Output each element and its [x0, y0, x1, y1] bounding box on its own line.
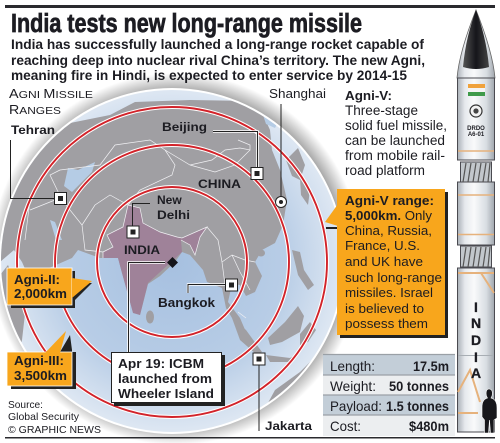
- Agni-V description: Agni-V:: [345, 89, 392, 103]
- Agni-V description: solid fuel missile,: [345, 118, 447, 133]
- callout: Agni-V range: Agni-V range:: [345, 193, 434, 208]
- callout: Agni-II: Agni-II:: [14, 272, 60, 287]
- intro text: [11, 37, 425, 83]
- intro text: India has successfully launched a long-range rocket capable of: [11, 37, 425, 52]
- callout: Agni-V range: is believed to: [345, 301, 424, 316]
- callout: Agni-V range: [325, 189, 448, 338]
- icon: human scale figure: [482, 389, 497, 433]
- India lettering: A: [471, 365, 481, 381]
- nose cone: [457, 10, 495, 78]
- label: New Delhi: [127, 193, 190, 238]
- label: Tehran: [10, 123, 66, 204]
- map heading: RANGES: [9, 103, 61, 117]
- callout: Agni-V range: China, Russia,: [345, 223, 432, 238]
- specifications table: 50 tonnes: [389, 378, 449, 394]
- map heading: [9, 87, 93, 117]
- India: [103, 205, 207, 315]
- label: Bangkok: [158, 279, 238, 310]
- borders: [25, 140, 255, 318]
- specifications table: 1.5 tonnes: [386, 398, 449, 414]
- source credit: Source:: [8, 399, 43, 411]
- Agni-V description: road platform: [345, 163, 425, 178]
- launch site marker: [128, 257, 178, 353]
- top rule: [5, 5, 495, 8]
- emblem: [470, 105, 482, 117]
- missile body: [458, 78, 494, 432]
- label: New Delhi: Delhi: [157, 208, 190, 222]
- label: Tehran: Tehran: [11, 123, 55, 137]
- callout: Agni-III: 3,500km: [14, 368, 67, 383]
- callout: launch date: Wheeler Island: [118, 387, 214, 401]
- label: China: CHINA: [198, 179, 241, 191]
- callout: launch date: [112, 352, 225, 406]
- label: Shanghai: [269, 87, 326, 208]
- label: New Delhi: New: [157, 193, 182, 207]
- specifications table: Length:: [330, 358, 375, 374]
- source credit: Global Security: [8, 411, 80, 423]
- callout: Agni-III: Agni-III:: [14, 353, 64, 368]
- callout: Agni-V range: 5,000km. Only: [345, 208, 433, 223]
- intro text: reaching deep into nuclear rival China’s territory. The new Agni,: [11, 53, 425, 68]
- land masses: [1, 100, 316, 402]
- bottom rule: [5, 437, 495, 438]
- ridged interstages: [463, 163, 490, 267]
- India lettering: N: [471, 315, 481, 331]
- callout: Agni-V range: such long-range: [345, 270, 442, 285]
- missile markings: DRDO: [467, 126, 485, 132]
- missile markings: A6-01: [468, 132, 485, 138]
- India lettering: I: [474, 299, 478, 315]
- specifications table: Weight:: [330, 378, 376, 394]
- specifications table: Cost:: [330, 418, 361, 434]
- Agni-V description: from mobile rail-: [345, 148, 445, 163]
- orange bands: [458, 151, 494, 413]
- specifications table: $480m: [409, 418, 449, 434]
- intro text: meaning fire in Hindi, is expected to enter service by 2014-15: [11, 68, 407, 83]
- specifications table: [323, 354, 455, 436]
- label: Jakarta: [253, 353, 312, 433]
- India lettering: I: [474, 349, 478, 365]
- map heading: AGNI MISSILE: [9, 87, 93, 101]
- callout: launch date: launched from: [118, 372, 212, 386]
- Caspian Sea and gulf: [50, 108, 280, 240]
- callout: Agni-II: 2,000km: [14, 286, 67, 301]
- India lettering: [471, 299, 481, 381]
- callout: Agni-V range: missiles. Israel: [345, 285, 433, 300]
- Agni-V description: Three-stage: [345, 103, 418, 118]
- globe map: [0, 73, 362, 443]
- label: Beijing: [162, 120, 263, 180]
- label: Bangkok: Bangkok: [158, 296, 215, 310]
- missile: [457, 10, 497, 433]
- callout: launch date: Apr 19: ICBM: [118, 357, 204, 371]
- Agni-V description: can be launched: [345, 133, 445, 148]
- callout: Agni-II: [7, 268, 92, 308]
- source credit: [8, 399, 101, 436]
- label: Jakarta: Jakarta: [265, 419, 312, 433]
- indian flag: [468, 84, 485, 96]
- label: Shanghai: Shanghai: [269, 87, 326, 101]
- specifications table: Payload:: [330, 398, 382, 414]
- Agni-V description: [345, 89, 447, 178]
- callout: Agni-V range: France, U.S.: [345, 238, 420, 253]
- specifications table: 17.5m: [413, 358, 449, 374]
- missile markings: [467, 126, 485, 138]
- label: Beijing: Beijing: [162, 120, 207, 134]
- source credit: © GRAPHIC NEWS: [8, 424, 101, 436]
- callout: Agni-III: [7, 331, 76, 389]
- callout: Agni-V range: possess them: [345, 316, 428, 331]
- title: India tests new long-range missile: [11, 10, 362, 38]
- label: India: INDIA: [124, 245, 160, 257]
- range rings: [17, 107, 327, 417]
- India lettering: D: [471, 332, 481, 348]
- callout: Agni-V range: and UK have: [345, 254, 423, 269]
